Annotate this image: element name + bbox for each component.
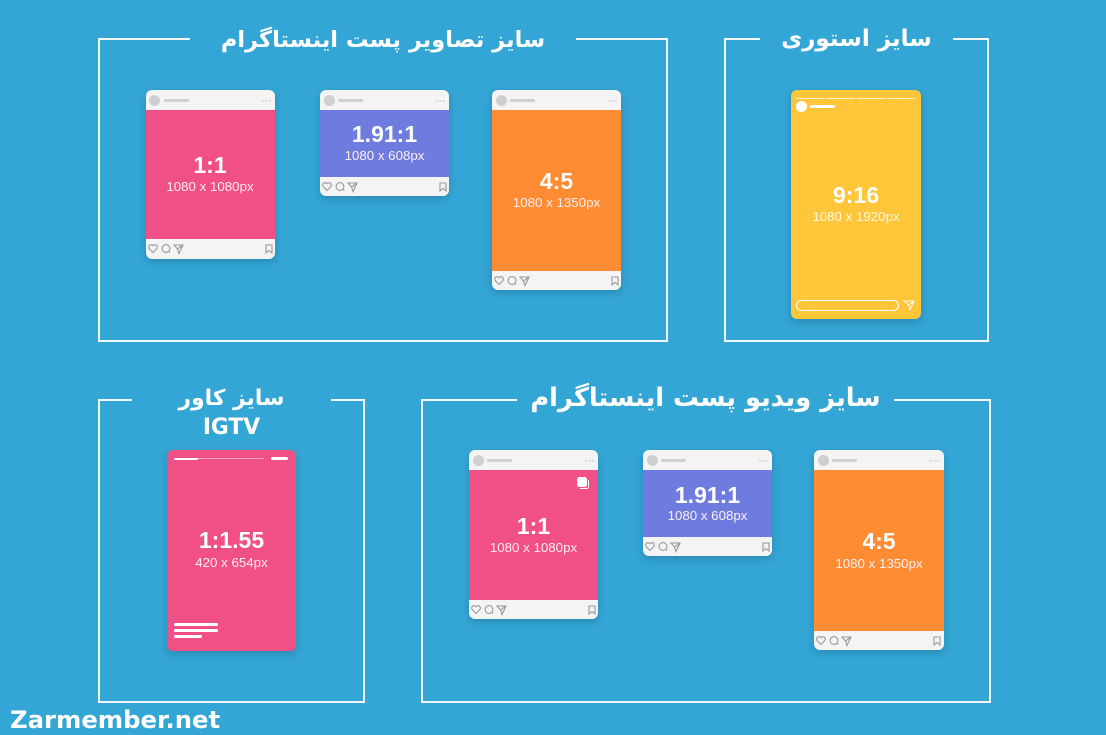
heading: video post sizes: سایز ویدیو پست اینستاگرام [530, 383, 881, 413]
image area 1:1 [146, 110, 274, 239]
caption lines [174, 623, 218, 638]
post card 1:1 [146, 90, 274, 259]
post card 4:5 [492, 90, 621, 290]
action icons [148, 244, 273, 255]
image area 4:5 [492, 110, 621, 271]
video card 1.91:1 [643, 450, 772, 556]
post card 1.91:1 [320, 90, 449, 196]
heading: IGTV cover size: سایز کاور [179, 386, 284, 411]
panel: Instagram image post sizes [98, 38, 668, 342]
IGTV card: 1:1.55 [199, 527, 264, 553]
heading: IGTV cover size [132, 384, 331, 442]
avatar and name [796, 101, 835, 112]
image area 4:5: 4:5 [540, 168, 573, 194]
image area 1:1: 1080 x 1080px [490, 540, 577, 555]
icon: send [903, 300, 915, 311]
image area 1:1: 1080 x 1080px [166, 179, 254, 194]
image area 4:5 [814, 470, 944, 631]
action icons [471, 605, 596, 616]
story card 9:16: 9:16 [833, 182, 879, 208]
image area 1:1 [469, 470, 598, 600]
image area 1.91:1 [643, 470, 772, 537]
image area 1.91:1: 1.91:1 [352, 121, 417, 147]
panel: Instagram video post sizes [421, 399, 991, 703]
video card 4:5 [814, 450, 944, 650]
action icons [494, 276, 619, 287]
progress bars [796, 98, 916, 99]
story card 9:16: 1080 x 1920px [812, 209, 900, 224]
image area 1:1: 1:1 [517, 513, 550, 539]
progress bar [174, 457, 288, 460]
image area 1:1: 1:1 [193, 152, 227, 178]
image area 1.91:1: 1080 x 608px [345, 148, 424, 163]
image area 4:5: 1080 x 1350px [513, 195, 600, 210]
action icons [322, 182, 447, 193]
IGTV card: 420 x 654px [195, 555, 268, 570]
image area 4:5: 4:5 [862, 528, 896, 554]
image area 1.91:1: 1.91:1 [675, 482, 740, 508]
message field [796, 300, 899, 311]
heading: IGTV cover size: IGTV [203, 415, 260, 440]
panel: IGTV cover size [98, 399, 365, 703]
action icons [816, 636, 941, 647]
story card 9:16 [791, 90, 921, 319]
image area 4:5: 1080 x 1350px [835, 556, 923, 570]
heading: image post sizes: سایز تصاویر پست اینستاگرام [221, 27, 545, 53]
image area 1.91:1 [320, 110, 449, 177]
image area 1.91:1: 1080 x 608px [668, 508, 747, 523]
panel: story size [724, 38, 989, 342]
video card 1:1 [469, 450, 598, 619]
icon: multiple media [577, 477, 589, 489]
IGTV card [167, 450, 296, 651]
watermark: Zarmember.net [10, 705, 220, 734]
heading: story size: سایز استوری [781, 26, 932, 52]
action icons [645, 542, 770, 553]
